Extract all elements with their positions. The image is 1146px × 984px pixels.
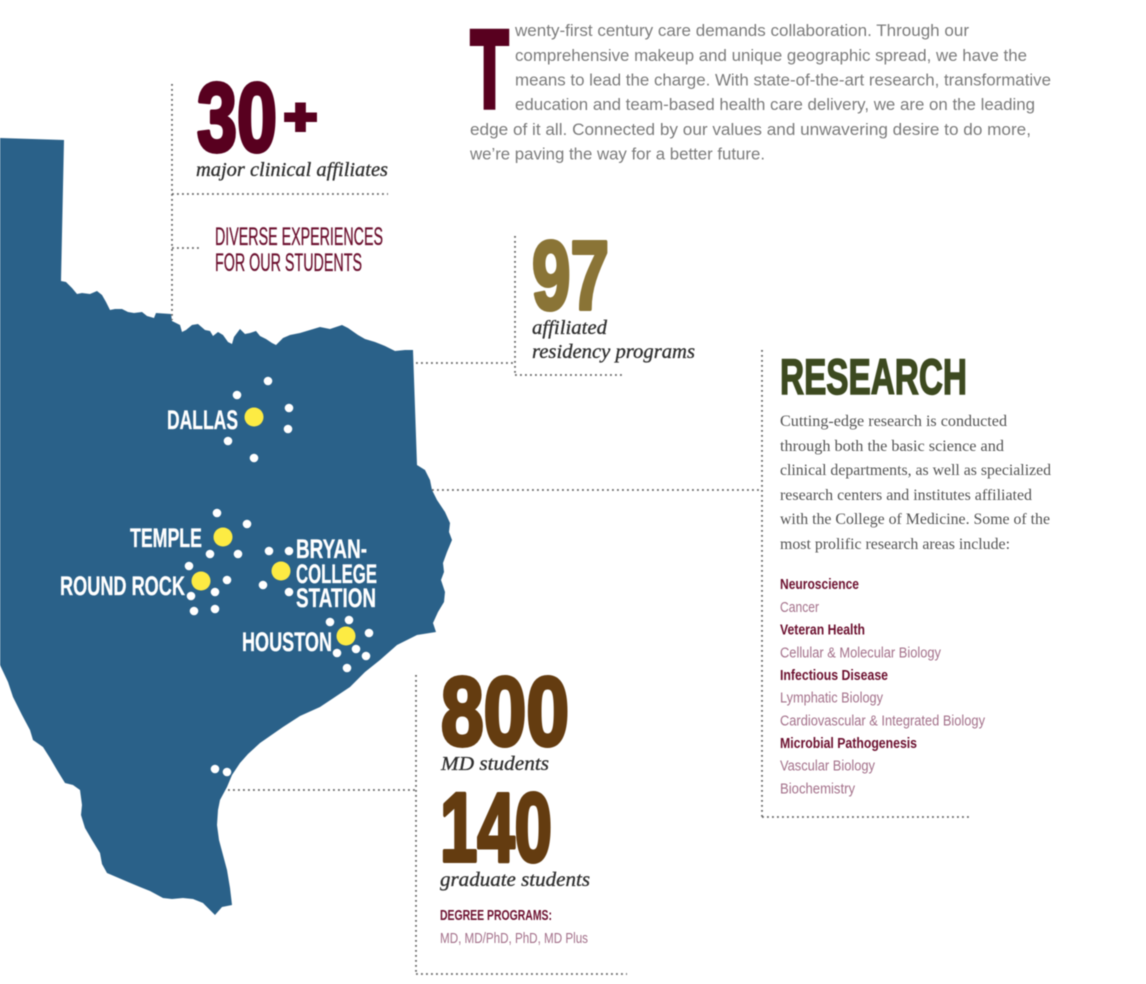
stat: 97 affiliated residency programs: 97 <box>532 221 609 330</box>
callout: diverse experiences: FOR OUR STUDENTS <box>215 249 362 277</box>
research description <box>780 413 1051 553</box>
panel: research <box>780 349 1051 798</box>
research areas list: Biochemistry <box>780 780 855 798</box>
marker cluster: Dallas <box>224 377 293 462</box>
map of Texas <box>0 138 452 915</box>
city label: Houston: HOUSTON <box>242 627 332 657</box>
markers: south Texas <box>211 765 231 776</box>
stat: 97 affiliated residency programs: residency programs <box>532 341 695 363</box>
research areas list: Infectious Disease <box>780 667 888 684</box>
research areas list: Cancer <box>780 599 819 616</box>
stat: 30+ major clinical affiliates: 30 <box>197 63 277 172</box>
intro paragraph with drop cap <box>469 8 1051 164</box>
research description: most prolific research areas include: <box>780 536 1010 553</box>
research description: Cutting-edge research is conducted <box>780 413 1007 430</box>
research description: research centers and institutes affiliated <box>780 487 1032 504</box>
stat: 140 graduate students: graduate students <box>440 869 590 891</box>
marker cluster: Round Rock <box>185 562 231 615</box>
research areas list <box>780 576 985 798</box>
marker cluster: Houston <box>326 616 373 672</box>
intro paragraph with drop cap: comprehensive makeup and unique geographic spread, we have the <box>515 46 1027 65</box>
research areas list: Veteran Health <box>780 622 865 638</box>
city label: Temple: TEMPLE <box>130 523 202 553</box>
city label: Bryan-College Station: COLLEGE <box>296 559 377 589</box>
city label: Bryan-College Station: BRYAN- <box>296 534 367 564</box>
intro paragraph with drop cap: edge of it all. Connected by our values and unwavering desire to do more, <box>470 120 1031 139</box>
stat: 140 graduate students: 140 <box>440 773 552 882</box>
marker cluster: Bryan-College Station <box>259 547 293 596</box>
research description: with the College of Medicine. Some of the <box>780 511 1050 528</box>
stat: 97 affiliated residency programs <box>532 221 695 363</box>
research description: clinical departments, as well as specialized <box>780 462 1051 479</box>
drop cap T: T <box>470 8 508 132</box>
intro paragraph with drop cap: education and team-based health care delivery, we are on the leading <box>515 95 1035 114</box>
stat: 800 MD students: 800 <box>441 657 569 766</box>
research areas list: Vascular Biology <box>780 758 875 774</box>
research areas list: Microbial Pathogenesis <box>780 735 917 752</box>
research areas list: Cellular & Molecular Biology <box>780 644 941 662</box>
callout: diverse experiences <box>215 223 383 277</box>
stat: 97 affiliated residency programs: affiliated <box>532 317 608 339</box>
degree programs: MD, MD/PhD, PhD, MD Plus <box>440 930 588 947</box>
intro paragraph with drop cap: we’re paving the way for a better future. <box>469 144 765 164</box>
research areas list: Cardiovascular & Integrated Biology <box>780 712 985 730</box>
research areas list: Lymphatic Biology <box>780 690 883 706</box>
heading: research: RESEARCH <box>780 349 967 405</box>
intro paragraph with drop cap: wenty-first century care demands collaboration. Through our <box>514 21 969 40</box>
research areas list: Neuroscience <box>780 576 859 593</box>
stat: 30+ major clinical affiliates <box>196 63 388 181</box>
city label: Round Rock: ROUND ROCK <box>60 571 185 601</box>
callout: diverse experiences: DIVERSE EXPERIENCES <box>215 223 383 251</box>
degree programs: DEGREE PROGRAMS: <box>440 907 552 924</box>
stat: 800 MD students: MD students <box>440 753 549 775</box>
city label: Dallas: DALLAS <box>167 405 238 435</box>
intro paragraph with drop cap: means to lead the charge. With state-of-the-art research, transformative <box>515 70 1051 90</box>
city label: Bryan-College Station <box>296 534 377 613</box>
city label: Bryan-College Station: STATION <box>296 583 376 613</box>
research description: through both the basic science and <box>780 438 1004 455</box>
marker cluster: Temple <box>206 509 251 558</box>
degree programs <box>440 907 588 947</box>
stat: 30+ major clinical affiliates: major clinical affiliates <box>196 159 388 181</box>
state outline <box>0 138 452 915</box>
stat: 30+ major clinical affiliates: + <box>284 89 317 145</box>
